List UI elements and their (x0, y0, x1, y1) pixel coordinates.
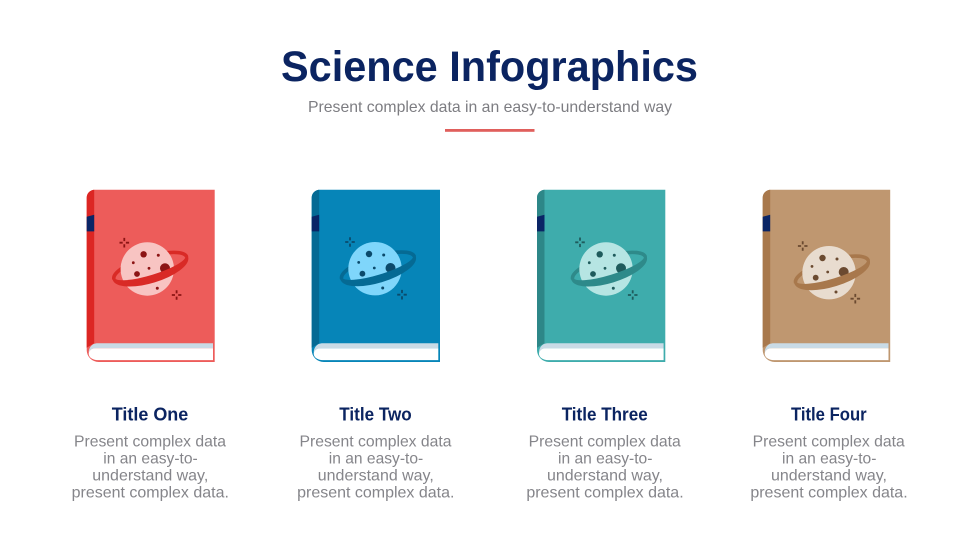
icon: red ringed planet (111, 238, 191, 300)
text block: column one: Title One (112, 404, 188, 424)
subtitle: Present complex data in an easy-to-understand way (308, 99, 672, 116)
text block: column two: Present complex data (300, 434, 452, 451)
text block: column one: understand way, (92, 468, 208, 484)
panel: teal book (537, 190, 665, 362)
icon: brown ringed planet (792, 241, 872, 304)
text block: column two: Title Two (339, 404, 412, 424)
text block: column three (526, 404, 684, 502)
text block: column three: Present complex data (529, 434, 681, 451)
panel: brown book (763, 190, 890, 362)
text block: column two: present complex data. (297, 485, 454, 502)
text block: column four: Title Four (791, 404, 867, 424)
icon: teal ringed planet (569, 238, 649, 300)
text block: column four: Present complex data (753, 434, 905, 451)
accent rule (445, 129, 534, 132)
text block: column three: understand way, (547, 468, 663, 484)
text block: column four: present complex data. (750, 485, 908, 502)
text block: column three: Title Three (562, 404, 648, 424)
text block: column one: present complex data. (72, 485, 229, 502)
text block: column three: in an easy-to- (558, 450, 652, 468)
icon: blue ringed planet (338, 237, 418, 300)
text block: column three: present complex data. (526, 485, 684, 502)
text block: column one: Present complex data (74, 434, 226, 451)
panel: red book (87, 190, 215, 362)
text block: column four (750, 404, 908, 502)
text block: column one: in an easy-to- (103, 450, 198, 468)
text block: column two (297, 404, 454, 502)
text block: column one (72, 404, 229, 502)
title: Science Infographics (281, 43, 698, 91)
text block: column four: understand way, (771, 468, 887, 484)
text block: column two: understand way, (318, 468, 434, 484)
panel: blue book (312, 190, 440, 362)
text block: column two: in an easy-to- (329, 450, 423, 468)
text block: column four: in an easy-to- (782, 450, 876, 468)
